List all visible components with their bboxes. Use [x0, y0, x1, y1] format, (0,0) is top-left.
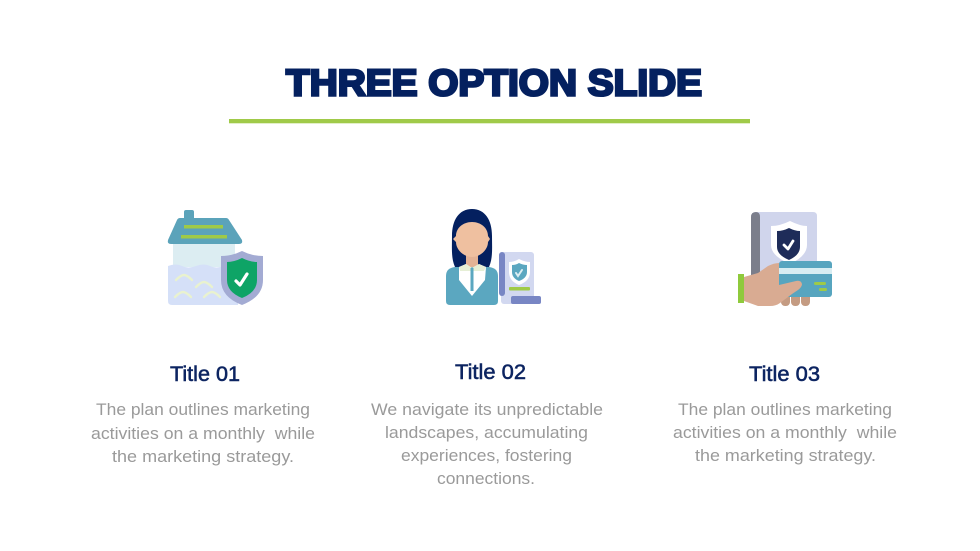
title underline [229, 119, 750, 123]
text block: description 2: landscapes, accumulating [385, 423, 588, 442]
text block: description 3: activities on a monthly while [673, 423, 897, 442]
heading: Title 02: Title 02 [455, 361, 526, 384]
text block: description 2: connections. [437, 469, 535, 488]
panel: option 3 [673, 212, 897, 465]
icon: house with shield [168, 210, 263, 305]
heading: Title 01: Title 01 [170, 363, 240, 386]
text block: description 1: activities on a monthly while [91, 424, 315, 443]
text block: description 1 [91, 400, 315, 466]
panel: option 1 [91, 210, 315, 466]
title: THREE OPTION SLIDE [286, 62, 702, 104]
heading: Title 03: Title 03 [749, 363, 820, 386]
text block: description 3: The plan outlines marketing [678, 400, 892, 419]
text block: description 1: The plan outlines marketing [96, 400, 310, 419]
icon: hand holding card and policy book [738, 212, 832, 306]
text block: description 3: the marketing strategy. [695, 446, 876, 465]
text block: description 3 [673, 400, 897, 465]
text block: description 2: experiences, fostering [401, 446, 572, 465]
text block: description 2 [371, 400, 603, 488]
panel: option 2 [371, 209, 603, 488]
text block: description 1: the marketing strategy. [112, 447, 294, 466]
text block: description 2: We navigate its unpredictable [371, 400, 603, 419]
icon: woman with policy document [446, 209, 541, 305]
